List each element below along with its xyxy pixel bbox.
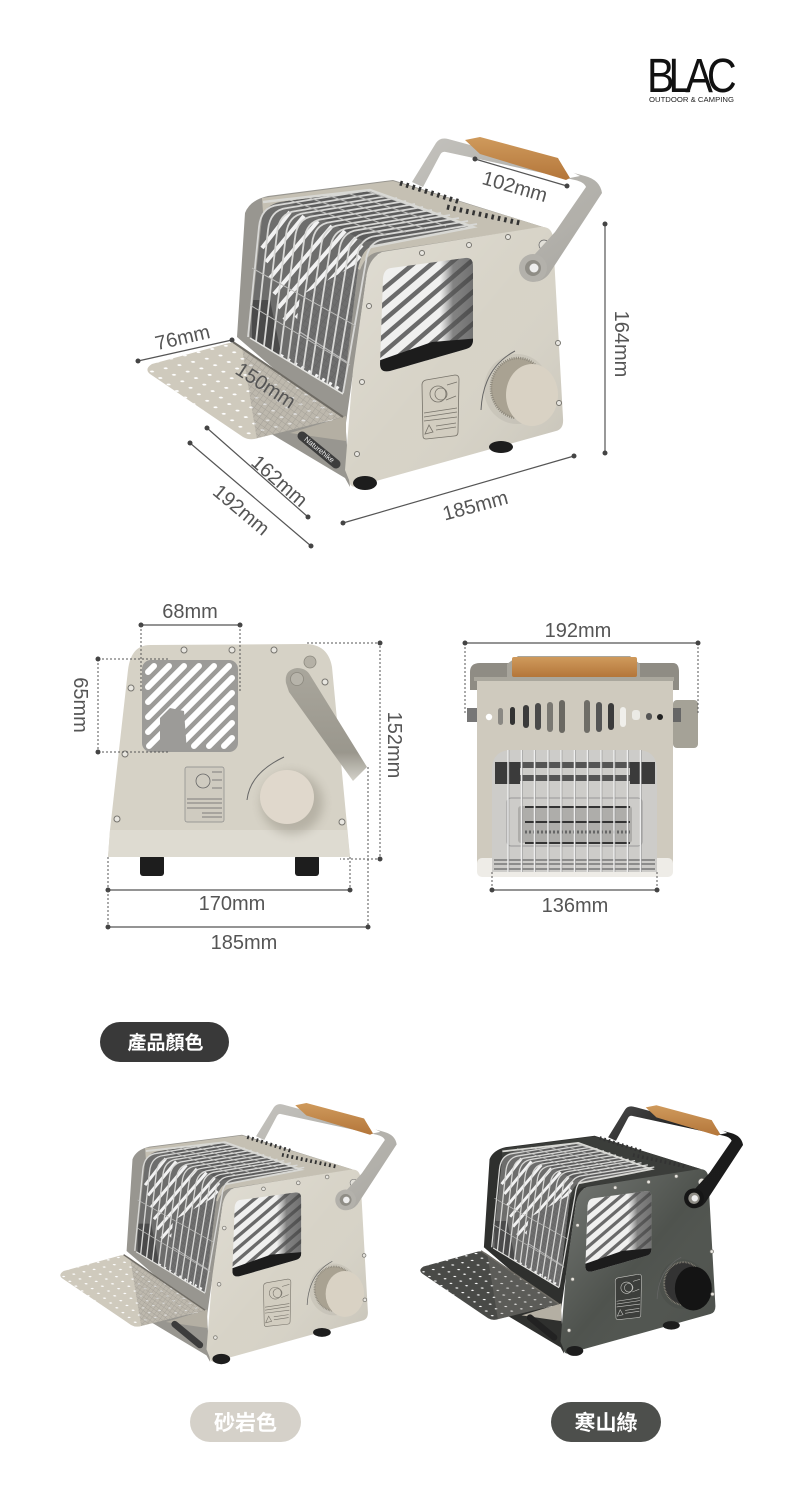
colour label: green [551,1402,661,1442]
dimension: depth 162mm [204,426,311,520]
product: sandstone colour [55,1103,397,1364]
dimension: window height 65mm: 65mm [69,677,91,733]
logo: BLAC: OUTDOOR & CAMPING [649,97,734,104]
product: cold mountain green colour [415,1105,743,1356]
dimension: front width 192mm: 192mm [545,620,611,642]
heading pill: product colours: 產品顏色 [127,1031,204,1054]
dimension: height 152mm: 152mm [383,712,405,778]
dimension: height 164mm: 164mm [610,311,632,377]
dimension: width 185mm: 185mm [211,932,277,954]
dimension: handle 102mm: 102mm [480,167,550,207]
logo: BLAC: BLAC [647,49,736,103]
dimension: window width 68mm [138,601,242,691]
heading pill: product colours [100,1022,229,1062]
dimension: width 170mm [106,857,352,915]
wooden handle [512,657,637,677]
dimension: window width 68mm: 68mm [162,601,218,623]
dimension: front width 192mm [462,620,700,715]
dimension: height 164mm [602,222,632,456]
warning sticker [185,767,224,822]
dimension: window height 65mm [69,656,170,754]
dimension: width 185mm [106,767,370,954]
dimension: width 170mm: 170mm [199,893,265,915]
dimension: handle 102mm [472,156,570,207]
dimension: tray 76mm [136,321,234,364]
dimension: front width 136mm: 136mm [542,895,608,917]
dimension: height 152mm [307,640,405,862]
dimension: depth 162mm: 162mm [247,451,311,512]
dimension: width 185mm [340,454,576,526]
handle arm [286,656,367,781]
dimension: depth 192mm [188,440,314,548]
colour label: sandstone: 砂岩色 [214,1412,277,1435]
dimension: tray 76mm: 76mm [153,321,212,355]
vent slots [486,700,663,733]
brand plate: Naturehike [302,435,336,465]
colour label: green: 寒山綠 [574,1411,638,1435]
front cage [492,750,657,872]
dimension: width 185mm: 185mm [440,487,511,525]
front view heater [467,656,698,877]
dimension: tray 150mm: 150mm [231,359,299,413]
dimension: depth 192mm: 192mm [208,481,273,540]
colour label: sandstone [190,1402,301,1442]
side window with stripes [142,660,238,752]
side view heater [108,644,367,876]
product illustration: sandstone heater perspective view [140,137,602,490]
dimension: front width 136mm [490,872,660,917]
knob [247,757,323,834]
